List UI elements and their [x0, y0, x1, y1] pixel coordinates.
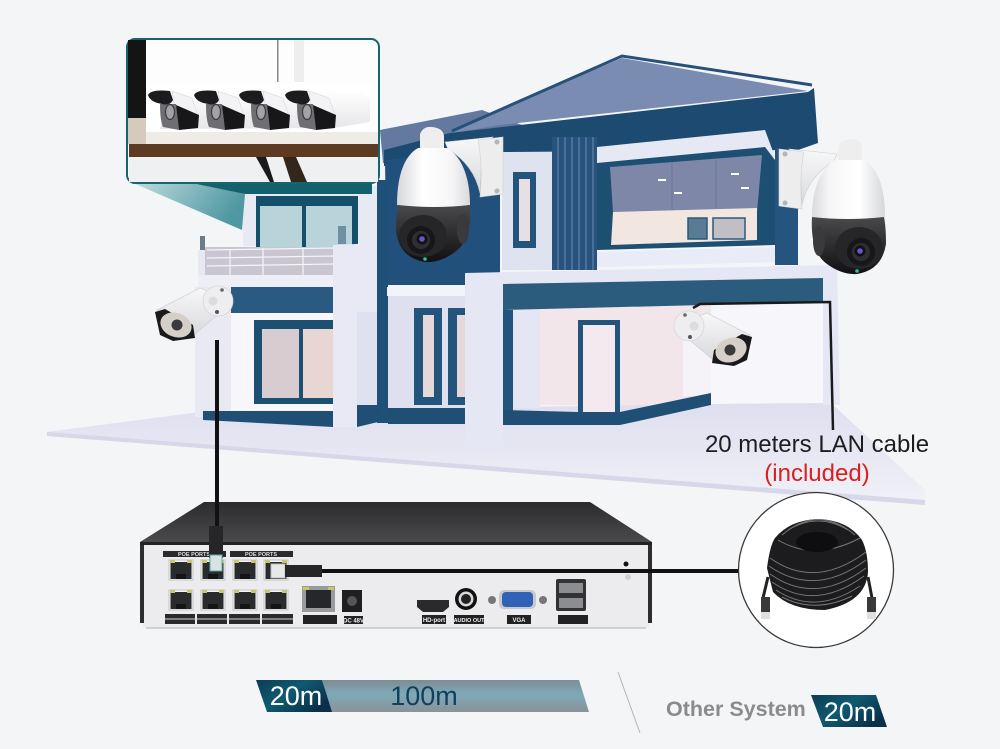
bullet camera, left — [155, 286, 233, 342]
DC power port — [342, 590, 364, 624]
other system 20m badge: 20m — [824, 697, 876, 727]
cable coil callout — [738, 492, 894, 648]
left roof — [380, 110, 530, 163]
USB ports — [556, 579, 588, 624]
teal callout wedge — [133, 183, 245, 230]
horizontal LAN cable with plug — [271, 564, 740, 578]
DC power port: DC 48V — [343, 618, 364, 624]
left ground wall — [195, 287, 333, 427]
100m range bar: 100m — [390, 681, 458, 711]
LAN port — [302, 586, 337, 624]
upper left wall with window — [502, 152, 554, 270]
other system label: Other System — [666, 697, 806, 721]
balcony — [198, 226, 346, 313]
bullet camera, right — [674, 311, 752, 367]
100m range bar: 20m — [270, 681, 322, 711]
PTZ dome camera, left — [396, 127, 503, 262]
PoE ports: POE PORTS — [245, 552, 277, 558]
porch lower wall — [503, 303, 823, 425]
upper siding wall — [385, 148, 500, 285]
house illustration — [133, 56, 840, 452]
centre lower wall — [357, 180, 478, 427]
wall between columns — [357, 312, 378, 405]
vertical slats — [552, 137, 597, 270]
NVR recorder — [140, 502, 652, 629]
left upper wing — [192, 184, 378, 248]
included note: (included) — [764, 460, 870, 487]
PTZ dome camera, right — [779, 139, 886, 274]
roof eave — [384, 88, 818, 166]
cable label: 20 meters LAN cable — [705, 431, 929, 458]
audio port — [454, 588, 485, 624]
100m range bar — [256, 680, 589, 712]
balcony column — [333, 243, 377, 427]
ground platform — [47, 402, 925, 505]
HDMI port — [417, 600, 449, 624]
HDMI port: HD-port — [423, 618, 445, 624]
other system 20m badge — [811, 695, 887, 727]
divider — [618, 672, 640, 733]
big upper window — [597, 130, 798, 267]
main roof — [452, 56, 812, 133]
PoE ports: POE PORTS — [178, 552, 210, 558]
vertical LAN cable with plug — [209, 340, 223, 571]
VGA port: VGA — [512, 618, 526, 624]
inset: camera kit photo — [127, 39, 379, 183]
audio port: AUDIO OUT — [454, 618, 485, 624]
PoE ports — [163, 551, 293, 624]
VGA port — [488, 590, 547, 624]
porch frame — [465, 265, 840, 452]
right cable run — [693, 302, 833, 430]
